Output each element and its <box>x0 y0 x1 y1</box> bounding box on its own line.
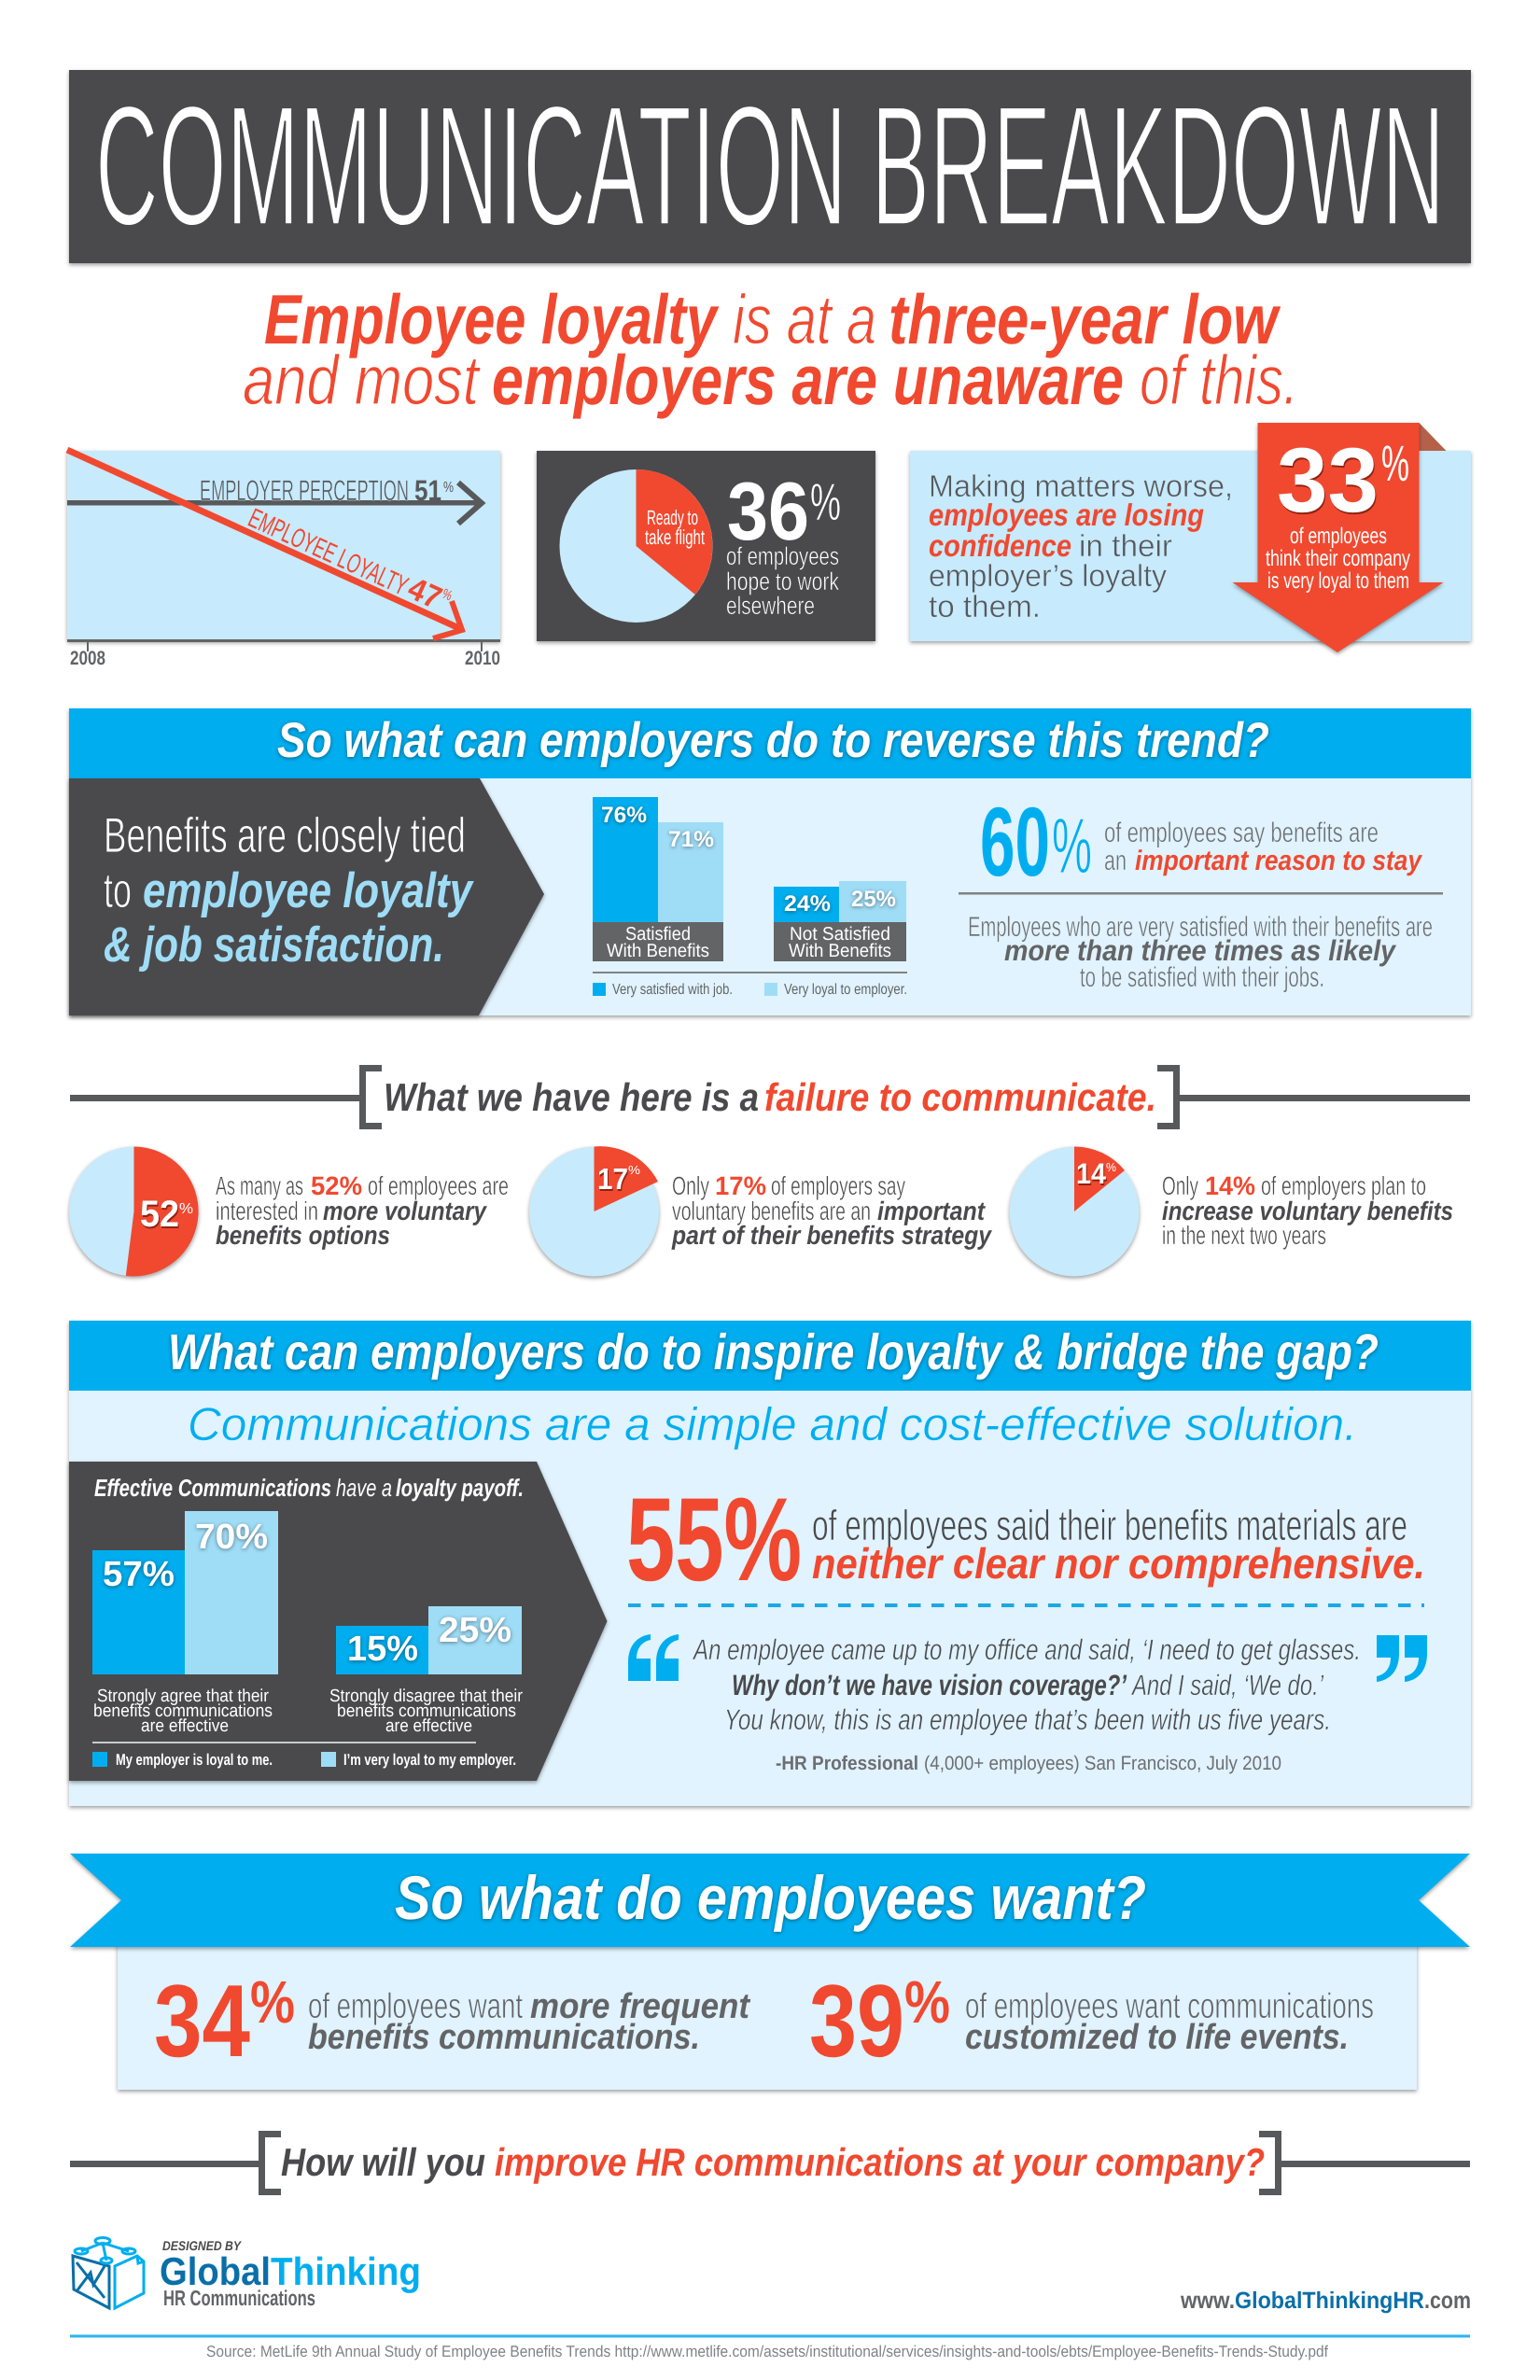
stat: 39%: % <box>904 1968 950 2036</box>
label: employer perception 51%: 51 <box>414 474 441 507</box>
bar captions: benefits communications <box>93 1701 273 1721</box>
headline: three-year low <box>889 280 1281 358</box>
bar chart: satisfaction and loyalty: With Benefits <box>607 941 709 961</box>
logo: Global Thinking: DESIGNED BY <box>162 2238 242 2253</box>
text block: 52 percent: of employees are <box>368 1171 509 1200</box>
title banner <box>69 69 1471 263</box>
bar chart: satisfaction and loyalty: With Benefits <box>789 941 891 961</box>
icon: cube <box>73 2238 144 2308</box>
quote attribution: -HR Professional <box>776 1753 918 1774</box>
icon: closing quote <box>1377 1635 1427 1682</box>
bar captions: are effective <box>141 1716 229 1736</box>
stat caption: hope to work <box>726 567 839 595</box>
bar chart: effective communications: 15% <box>347 1630 418 1669</box>
bar chart: satisfaction and loyalty: 25% <box>851 887 896 912</box>
logo: Global Thinking <box>73 2238 421 2310</box>
panel: inspire loyalty <box>69 1321 1471 1806</box>
pie chart: 17 percent: 17 <box>597 1162 628 1196</box>
stat: 39%: 39 <box>809 1964 904 2079</box>
stat caption: more frequent <box>530 1987 750 2026</box>
text block: confidence <box>929 528 1071 563</box>
source line: Source: MetLife 9th Annual Study of Employee Benefits Trends http://www.metlife.com/assets/institutional/services/insights-and-tools/ebts/Employee-Benefits-Trends-Study.pdf <box>206 2343 1328 2360</box>
arrow caption: is very loyal to them <box>1267 568 1409 594</box>
headline: employers are unaware <box>492 341 1124 419</box>
website url <box>1180 2288 1471 2314</box>
stat caption: an <box>1104 846 1127 876</box>
quote text: Why don’t we have vision coverage?’ <box>732 1669 1127 1701</box>
panel: loyalty line chart <box>67 450 500 669</box>
text block: 17 percent: important <box>877 1197 986 1225</box>
stat caption: of employees want communications <box>965 1987 1374 2026</box>
bar chart: satisfaction and loyalty: 71% <box>668 827 714 852</box>
heading: failure to communicate: What we have here is a <box>384 1075 759 1119</box>
text block: 17 percent: 17% <box>715 1171 766 1200</box>
text block: 17 percent: part of their benefits strategy <box>671 1221 992 1250</box>
legend: I’m very loyal to my employer. <box>343 1751 516 1769</box>
text block: 14 percent: in the next two years <box>1162 1221 1326 1250</box>
text block: 14 percent: of employers plan to <box>1261 1171 1426 1200</box>
arrow: red down arrow <box>1232 423 1447 652</box>
arrow caption <box>1266 524 1410 594</box>
subheading: Communications are a simple and cost-effective solution. <box>188 1398 1357 1450</box>
text block: 52 percent: As many as <box>216 1171 303 1200</box>
heading: improve HR communications: How will you <box>281 2140 485 2184</box>
ribbon banner: So what do employees want? <box>395 1863 1146 1932</box>
stat caption <box>812 1501 1425 1588</box>
stat caption: neither clear nor comprehensive. <box>812 1539 1425 1588</box>
text block: 14 percent: 14% <box>1205 1171 1255 1200</box>
stat caption <box>726 542 839 620</box>
text block: 52 percent <box>216 1171 509 1250</box>
text block: 52 percent: interested in <box>216 1197 318 1225</box>
text block: 17 percent <box>671 1171 992 1250</box>
pie chart: 14 percent <box>1010 1146 1139 1277</box>
legend: My employer is loyal to me. <box>116 1751 273 1769</box>
bar captions <box>93 1687 524 1736</box>
stat: 36%: 36 <box>727 465 809 557</box>
stat caption: benefits communications. <box>308 2018 700 2057</box>
website url: www. <box>1180 2288 1235 2314</box>
heading: improve HR communications <box>70 2134 1470 2191</box>
panel: losing confidence <box>910 423 1471 652</box>
ribbon banner <box>70 1854 1470 1947</box>
heading: improve HR communications: improve HR communications at your company? <box>495 2140 1265 2184</box>
quote text: And I said, ‘We do.’ <box>1130 1669 1324 1701</box>
panel: reverse this trend <box>69 708 1471 1015</box>
text block <box>929 469 1233 623</box>
chart title: Effective Communications <box>94 1474 331 1502</box>
text block: 14 percent: increase voluntary benefits <box>1162 1197 1453 1225</box>
label: employer perception 51%: % <box>443 480 454 496</box>
text block: Making matters worse, <box>929 469 1233 503</box>
stat caption: customized to life events. <box>965 2018 1349 2057</box>
quote text: You know, this is an employee that’s been with us five years. <box>724 1703 1331 1736</box>
axis label: 2010: 2010 <box>465 648 500 669</box>
stat: 33%: % <box>1381 436 1409 492</box>
headline <box>243 280 1298 419</box>
text block: 17 percent: voluntary benefits are an <box>672 1197 871 1225</box>
website url: GlobalThinkingHR <box>1235 2288 1424 2314</box>
label: employee loyalty 47%: % <box>440 586 455 604</box>
stat caption <box>1104 818 1422 876</box>
pie chart: 52 percent: 52 <box>140 1194 179 1235</box>
legend <box>92 1751 516 1769</box>
headline: of this. <box>1140 341 1298 419</box>
stat caption <box>308 1987 750 2057</box>
quote text <box>692 1633 1361 1736</box>
slice label: take flight <box>645 525 705 549</box>
stat caption: elsewhere <box>726 592 815 620</box>
stat: 33%: 33 <box>1277 428 1379 531</box>
chart title: have a <box>336 1474 392 1502</box>
quote text: An employee came up to my office and said, ‘I need to get glasses. <box>692 1633 1361 1666</box>
text block: 52 percent: 52% <box>311 1171 362 1200</box>
stat caption: of employees <box>726 542 839 570</box>
slice label <box>645 506 705 549</box>
pie chart: 52 percent <box>69 1146 199 1277</box>
icon: opening quote <box>628 1634 679 1681</box>
panel: 36% pie <box>537 451 875 641</box>
pie chart: 52 percent: % <box>179 1201 193 1217</box>
label: employer perception 51%: EMPLOYER PERCEPTION <box>200 474 409 507</box>
slice label: Ready to <box>647 506 698 529</box>
callout: benefits tied to loyalty: & job satisfaction. <box>104 917 444 973</box>
bar chart: effective communications <box>92 1511 522 1674</box>
text block: 14 percent <box>1162 1171 1453 1250</box>
quote attribution <box>776 1753 1281 1774</box>
stat caption: of employees say benefits are <box>1104 818 1379 848</box>
panel: what employees want <box>70 1854 1470 2090</box>
callout: benefits tied to loyalty: to <box>104 863 132 918</box>
headline: and most <box>243 341 482 419</box>
bar captions: are effective <box>385 1716 472 1736</box>
axis label: 2008: 2008 <box>70 648 105 669</box>
heading: failure to communicate <box>70 1068 1470 1126</box>
text block: to them. <box>929 589 1041 623</box>
arrow: employee loyalty <box>67 450 462 638</box>
bar chart: effective communications: 57% <box>103 1555 175 1594</box>
arrow caption: think their company <box>1266 546 1410 571</box>
logo: Global Thinking: HR Communications <box>163 2286 315 2310</box>
headline: Employee loyalty <box>264 280 720 358</box>
bar chart: satisfaction and loyalty: 76% <box>601 803 647 828</box>
bar chart: effective communications: 25% <box>439 1611 511 1650</box>
callout: loyalty payoff bars <box>69 1462 607 1781</box>
section heading: So what can employers do to reverse this trend? <box>277 713 1269 768</box>
callout: benefits tied to loyalty: Benefits are closely tied <box>104 808 466 863</box>
headline: is at a <box>733 280 876 358</box>
text block: 17 percent: Only <box>672 1171 709 1200</box>
text block: three times as likely: to be satisfied with their jobs. <box>1080 962 1324 993</box>
arrow: employer perception <box>67 483 482 524</box>
stat caption: important reason to stay <box>1135 846 1422 876</box>
bar captions: benefits communications <box>337 1701 516 1721</box>
logo: Global Thinking: Global <box>160 2249 271 2293</box>
pie chart: 36 percent <box>560 469 713 623</box>
text block: three times as likely: more than three times as likely <box>1004 934 1397 967</box>
pie chart: 14 percent: % <box>1106 1160 1116 1174</box>
stat: 60%: % <box>1052 802 1092 889</box>
logo: Global Thinking: Thinking <box>271 2249 421 2293</box>
text block: employees are losing <box>929 497 1204 532</box>
stat caption <box>965 1987 1374 2057</box>
arrow caption: of employees <box>1290 524 1387 549</box>
callout: benefits tied to loyalty: employee loyalty <box>143 863 474 918</box>
bar chart: satisfaction and loyalty <box>593 797 907 998</box>
text block: 52 percent: more voluntary <box>323 1197 487 1225</box>
bar chart: effective communications: 70% <box>195 1518 268 1557</box>
bar chart: satisfaction and loyalty: Very satisfied with job. <box>612 982 733 998</box>
text block: 52 percent: benefits options <box>216 1221 390 1250</box>
bar chart: satisfaction and loyalty: Satisfied <box>625 924 691 945</box>
label: employee loyalty 47% <box>244 498 455 621</box>
bar chart: satisfaction and loyalty: Very loyal to employer. <box>784 982 907 998</box>
quote attribution: (4,000+ employees) San Francisco, July 2010 <box>924 1753 1281 1774</box>
heading: failure to communicate: failure to communicate. <box>764 1075 1156 1119</box>
text block: three times as likely <box>968 912 1433 993</box>
bar chart: satisfaction and loyalty: 24% <box>784 891 831 917</box>
pie chart: 17 percent: % <box>628 1163 640 1177</box>
bar captions: Strongly agree that their <box>97 1687 270 1706</box>
text block: employer’s loyalty <box>929 558 1167 593</box>
stat caption: of employees want <box>308 1987 523 2026</box>
text block: in their <box>1079 528 1172 563</box>
chart title: loyalty payoff. <box>396 1474 524 1502</box>
stat: 34%: 34 <box>154 1964 250 2079</box>
stat: 60%: 60 <box>980 788 1050 897</box>
callout: benefits tied to loyalty <box>69 778 544 1015</box>
website url: .com <box>1424 2288 1471 2314</box>
pie chart: 14 percent: 14 <box>1076 1157 1107 1190</box>
bar captions: Strongly disagree that their <box>329 1687 524 1706</box>
stat: 36%: % <box>810 472 841 531</box>
text block: 17 percent: of employers say <box>771 1171 905 1200</box>
bar chart: satisfaction and loyalty: Not Satisfied <box>790 924 890 945</box>
pie chart: 17 percent <box>529 1146 659 1277</box>
label: employee loyalty 47%: 47 <box>402 570 447 616</box>
stat: 34%: % <box>250 1968 295 2036</box>
stat: 55%: 55% <box>626 1473 802 1605</box>
text block: 14 percent: Only <box>1162 1171 1198 1200</box>
label: employee loyalty 47%: EMPLOYEE LOYALTY <box>244 503 413 602</box>
